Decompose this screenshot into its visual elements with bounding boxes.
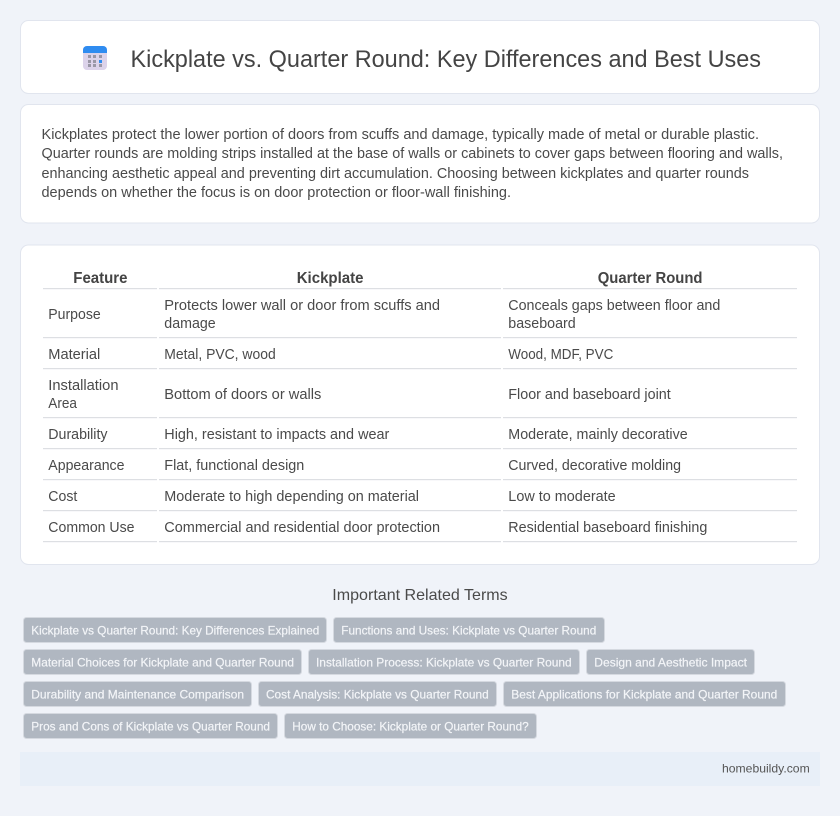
row: common use: Commercial and residential door protection xyxy=(164,520,440,536)
row: durability: Moderate, mainly decorative xyxy=(508,427,688,443)
row: common use: Residential baseboard finishing xyxy=(508,520,707,536)
row: installation area xyxy=(43,378,797,418)
row: common use: Common Use xyxy=(48,520,134,536)
panel: introduction text: Quarter rounds are molding strips installed at the base of walls or cabinets to cover gaps between flooring and walls, xyxy=(42,146,783,162)
tag: functions and uses: Functions and Uses: Kickplate vs Quarter Round xyxy=(341,623,596,637)
table header row: Kickplate xyxy=(297,270,364,287)
panel: introduction text: Kickplates protect the lower portion of doors from scuffs and damage, typically made of metal or durable plastic. xyxy=(42,127,759,143)
row: material: Wood, MDF, PVC xyxy=(508,347,613,363)
tag: pros and cons: Pros and Cons of Kickplate vs Quarter Round xyxy=(31,719,270,733)
row: purpose: baseboard xyxy=(508,316,576,332)
row: cost: Moderate to high depending on material xyxy=(164,489,419,505)
tag: cost analysis: Cost Analysis: Kickplate vs Quarter Round xyxy=(266,687,489,701)
tag: material choices: Material Choices for Kickplate and Quarter Round xyxy=(31,655,294,669)
tag: installation process: Installation Process: Kickplate vs Quarter Round xyxy=(316,655,572,669)
row: material: Material xyxy=(48,347,100,363)
tag: pros and cons xyxy=(24,714,278,738)
panel: introduction text: enhancing aesthetic appeal and preventing dirt accumulation. Choosing between kickplates and quarter rounds xyxy=(42,166,749,182)
row: purpose: Conceals gaps between floor and xyxy=(508,298,720,314)
row: purpose: Purpose xyxy=(48,307,101,323)
row: appearance xyxy=(43,458,797,480)
row: appearance: Appearance xyxy=(48,458,124,474)
row: appearance: Curved, decorative molding xyxy=(508,458,681,474)
tag: how to choose: How to Choose: Kickplate or Quarter Round? xyxy=(292,719,529,733)
row: installation area: Bottom of doors or walls xyxy=(164,387,321,403)
table header row: Feature xyxy=(73,270,128,287)
tag: best applications xyxy=(504,682,786,706)
tag: how to choose xyxy=(284,714,536,738)
footer: homebuildy.com xyxy=(722,762,810,776)
panel: comparison table xyxy=(20,245,820,564)
tag: key differences xyxy=(24,618,326,642)
icon: calendar xyxy=(83,46,107,70)
table header row xyxy=(43,270,797,289)
row: purpose: Protects lower wall or door from scuffs and xyxy=(164,298,440,314)
row: durability: High, resistant to impacts and wear xyxy=(164,427,389,443)
panel: introduction text xyxy=(20,104,820,223)
tag: functions and uses xyxy=(334,618,604,642)
tag: cost analysis xyxy=(258,682,496,706)
tag: design and aesthetic: Design and Aesthetic Impact xyxy=(594,655,748,669)
tag: design and aesthetic xyxy=(586,650,754,674)
row: cost: Low to moderate xyxy=(508,489,616,505)
table header row: Quarter Round xyxy=(598,270,702,287)
row: installation area: Floor and baseboard joint xyxy=(508,387,671,403)
row: cost xyxy=(43,489,797,511)
row: material: Metal, PVC, wood xyxy=(164,347,276,363)
row: installation area: Area xyxy=(48,396,77,412)
header panel xyxy=(20,20,820,94)
title: Kickplate vs. Quarter Round: Key Differences and Best Uses xyxy=(130,46,761,73)
row: cost: Cost xyxy=(48,489,77,505)
tag: durability and maintenance xyxy=(24,682,252,706)
row: installation area: Installation xyxy=(48,378,118,394)
tag: installation process xyxy=(308,650,580,674)
heading: important related terms: Important Related Terms xyxy=(332,587,508,604)
row: durability xyxy=(43,427,797,449)
tag: best applications: Best Applications for Kickplate and Quarter Round xyxy=(511,687,777,701)
row: purpose: damage xyxy=(164,316,216,332)
row: purpose xyxy=(43,298,797,338)
panel: introduction text: depends on whether the focus is on door protection or floor-wall finishing. xyxy=(42,185,511,201)
footer xyxy=(20,752,820,786)
row: common use xyxy=(43,520,797,542)
row: appearance: Flat, functional design xyxy=(164,458,304,474)
tag: durability and maintenance: Durability and Maintenance Comparison xyxy=(31,687,244,701)
row: durability: Durability xyxy=(48,427,108,443)
row: material xyxy=(43,347,797,369)
tag: key differences: Kickplate vs Quarter Round: Key Differences Explained xyxy=(31,623,319,637)
related term tags xyxy=(24,618,786,738)
tag: material choices xyxy=(24,650,302,674)
